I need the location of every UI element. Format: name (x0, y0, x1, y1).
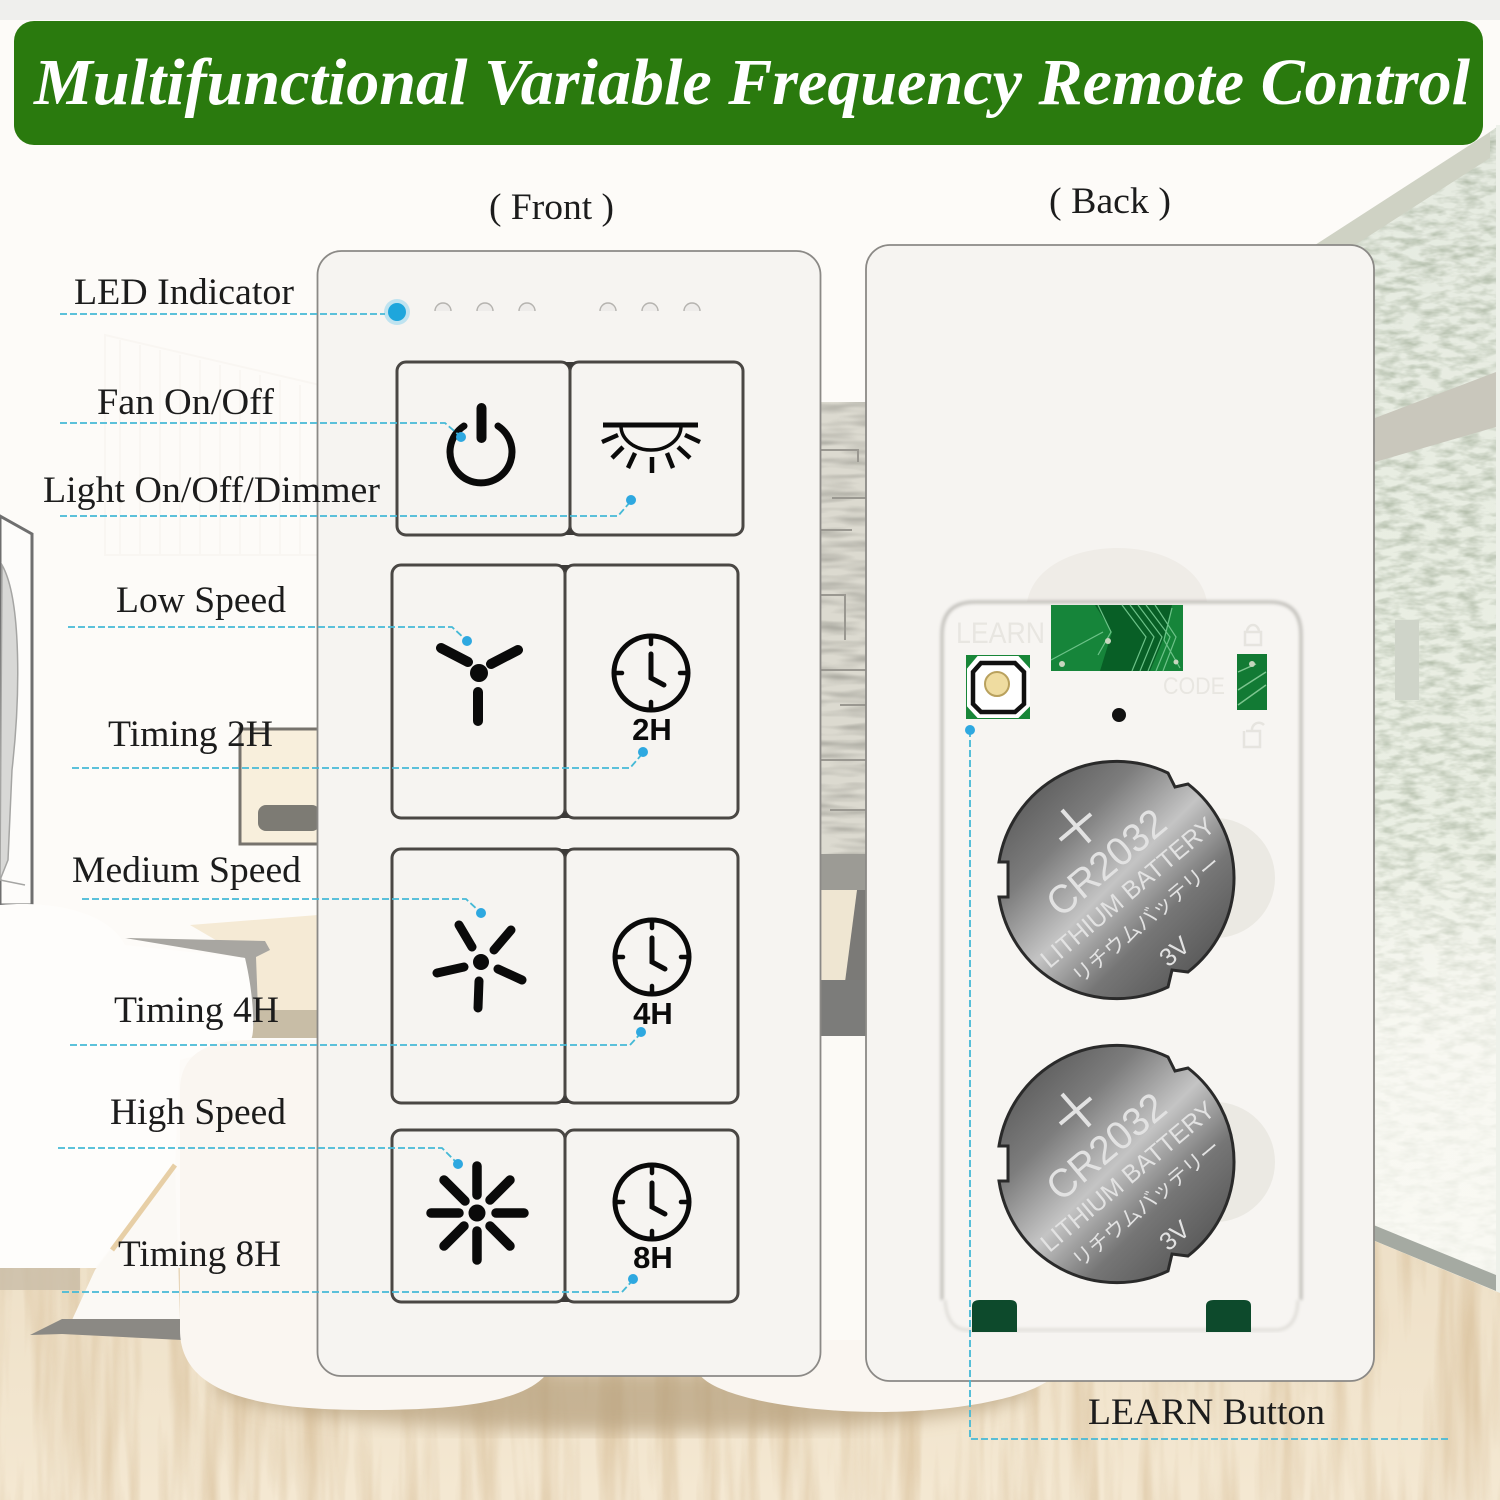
battery bottom: 3V (1154, 1215, 1196, 1256)
callout: LEARN Button: LEARN Button (1088, 1392, 1325, 1433)
icon: five blade fan (437, 925, 522, 1008)
battery top (999, 761, 1275, 999)
buttons: high speed and 8H (392, 1130, 738, 1302)
battery compartment: LEARN (956, 617, 1045, 650)
code switch (1237, 625, 1267, 747)
icon: clock 2H: 2H (632, 712, 672, 747)
icon: three blade fan (441, 648, 518, 721)
circuit board (1051, 605, 1183, 671)
background: cabinet and side table (125, 915, 318, 1038)
callout: Fan On/Off: Fan On/Off (97, 382, 275, 423)
LEARN button (966, 655, 1030, 719)
callout: LEARN Button (965, 725, 1450, 1439)
callout: Timing 4H (70, 990, 646, 1045)
icon: clock 8H: 8H (633, 1240, 673, 1275)
icon: eight blade fan (431, 1166, 524, 1260)
battery top: LITHIUM BATTERY (1035, 812, 1221, 974)
callout: LED Indicator: LED Indicator (74, 272, 294, 313)
buttons: low speed and 2H (392, 565, 738, 818)
buttons: power and light (397, 362, 743, 535)
background: stools (180, 1040, 1062, 1412)
battery bottom: CR2032 (1038, 1085, 1175, 1210)
callout: Medium Speed: Medium Speed (72, 850, 301, 891)
icon: clock 4H (615, 920, 689, 1031)
battery compartment (942, 602, 1301, 1332)
background: window (1300, 125, 1500, 1500)
title banner (14, 21, 1483, 145)
icon: power (450, 408, 512, 483)
callout: Timing 2H: Timing 2H (108, 714, 273, 755)
battery bottom: LITHIUM BATTERY (1035, 1096, 1221, 1258)
heading: front: ( Front ) (489, 187, 614, 228)
battery top: 3V (1154, 931, 1196, 972)
background: radiator (105, 335, 320, 555)
callout: Medium Speed (72, 850, 486, 918)
clips (972, 1300, 1251, 1332)
background: picture frame centre (240, 729, 320, 844)
callout: Timing 8H (62, 1234, 638, 1292)
callout: High Speed: High Speed (110, 1092, 286, 1133)
panel: remote front (318, 251, 820, 1376)
callout: Timing 4H: Timing 4H (114, 990, 279, 1031)
battery bottom: リチウムバッテリー (1069, 1136, 1225, 1272)
callout: Low Speed (68, 580, 472, 646)
battery top: CR2032 (1038, 801, 1175, 926)
callout: Light On/Off/Dimmer: Light On/Off/Dimmer (43, 470, 380, 511)
callout: High Speed (58, 1092, 463, 1169)
battery compartment: CODE (1163, 673, 1225, 700)
icon: clock 2H (614, 636, 688, 747)
background: stone wall (821, 402, 866, 1376)
icon: clock 8H (615, 1165, 689, 1275)
background: picture frame left (0, 516, 32, 905)
icon: light (602, 425, 700, 473)
background: sofa (0, 904, 253, 1340)
callout: Timing 2H (72, 714, 648, 768)
callout: Timing 8H: Timing 8H (118, 1234, 281, 1275)
heading: back: ( Back ) (1049, 181, 1171, 222)
callout: Light On/Off/Dimmer (43, 470, 636, 516)
title banner: Multifunctional Variable Frequency Remote Control (33, 46, 1471, 119)
LED indicators (384, 299, 700, 325)
callout: Low Speed: Low Speed (116, 580, 287, 621)
icon: clock 4H: 4H (633, 996, 673, 1031)
battery bottom (999, 1045, 1275, 1283)
panel: remote back (866, 245, 1374, 1381)
battery top: リチウムバッテリー (1069, 852, 1225, 988)
background: floor (0, 1210, 1500, 1500)
buttons: medium speed and 4H (392, 849, 738, 1103)
callout: Fan On/Off (60, 382, 466, 442)
